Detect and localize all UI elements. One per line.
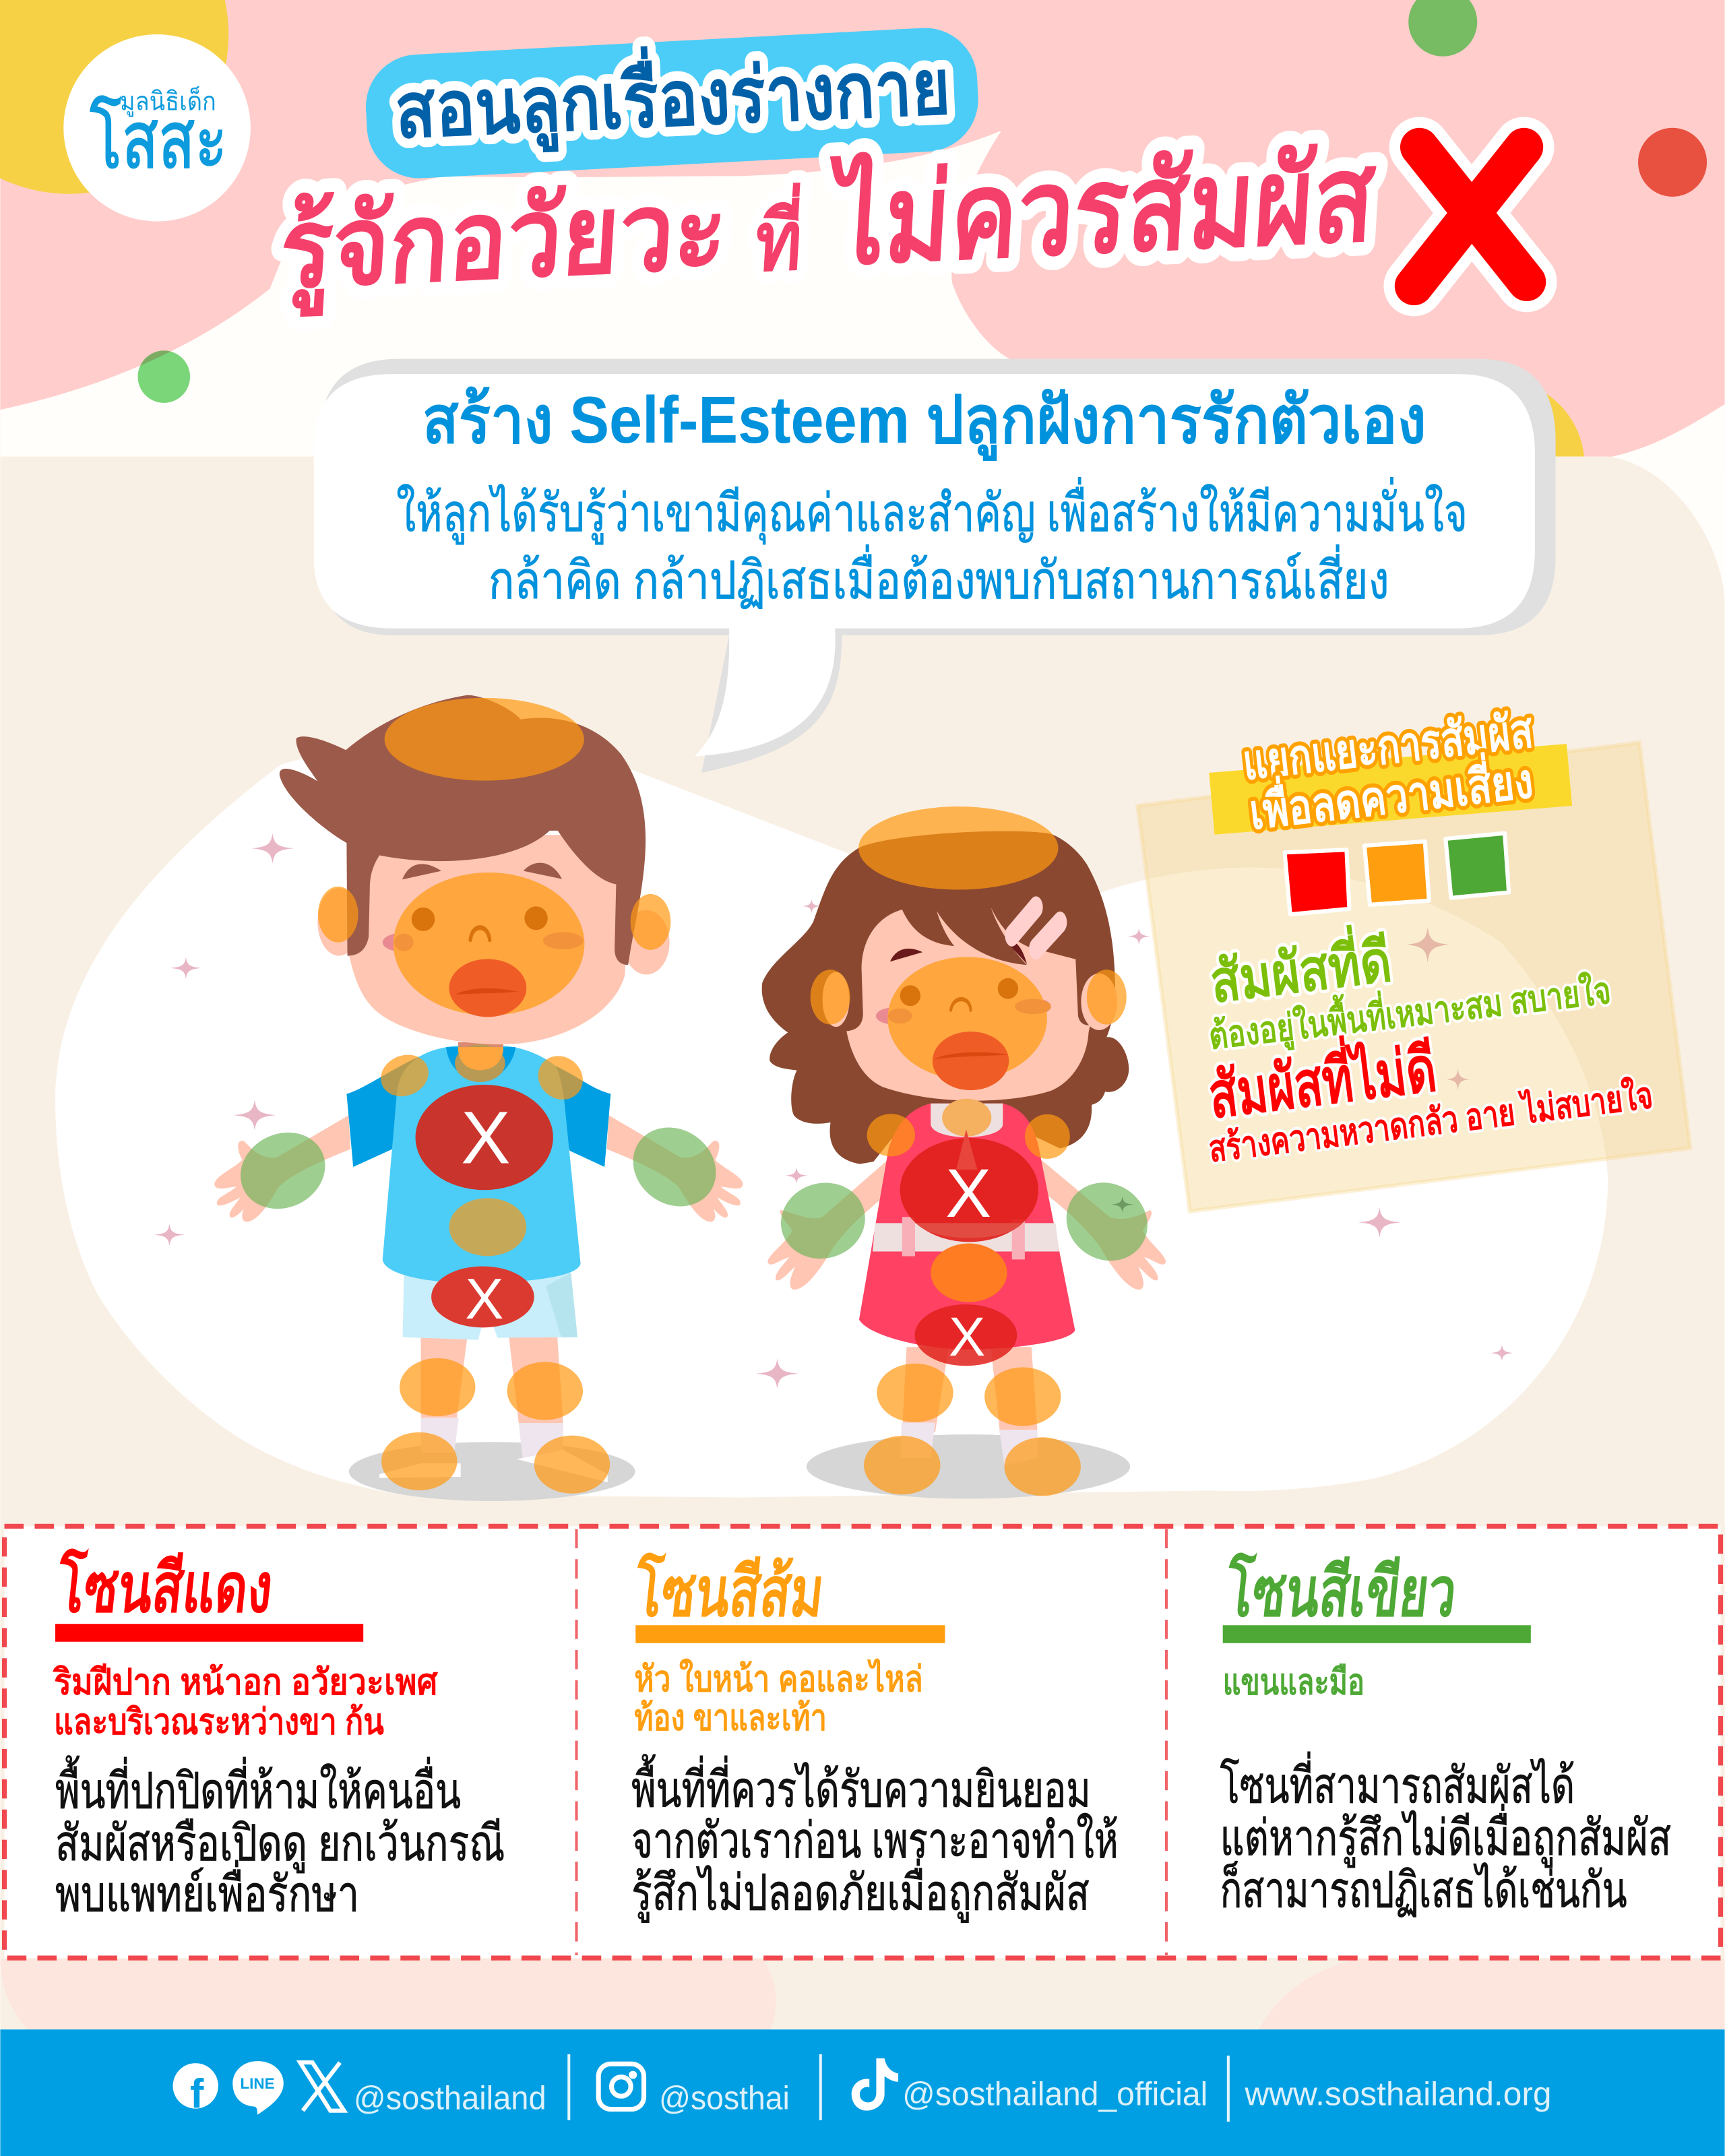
zone: orange: หัว ใบหน้า คอและไหล่ bbox=[634, 1658, 923, 1699]
zone: orange: พื้นที่ที่ควรได้รับความยินยอม bbox=[631, 1754, 1091, 1818]
orange zone: legs and feet bbox=[864, 1364, 1081, 1496]
ground shadow bbox=[807, 1434, 1130, 1499]
good touch text: สัมผัสที่ดี bbox=[1205, 920, 1395, 1015]
zone: orange: โซนสีส้ม bbox=[631, 1552, 828, 1630]
zone: green bbox=[1220, 1552, 1671, 1918]
colour swatches bbox=[1285, 833, 1509, 914]
orange zone: shoulders, neck, belly bbox=[379, 1044, 585, 1256]
orange zone: head and face bbox=[811, 806, 1127, 1080]
zone: red: ริมฝีปาก หน้าอก อวัยวะเพศ bbox=[53, 1662, 439, 1702]
red zone: lips bbox=[449, 959, 526, 1017]
green zone: arms bbox=[237, 1118, 720, 1216]
decorative dot: red bbox=[1638, 128, 1707, 197]
main title: ที่ bbox=[753, 183, 806, 289]
white X marks: X bbox=[461, 1097, 511, 1180]
logo: โสสะ bbox=[90, 96, 227, 185]
white X marks: X bbox=[949, 1306, 985, 1368]
divider lines bbox=[569, 2054, 1228, 2122]
icon: instagram bbox=[598, 2064, 644, 2110]
zone: red: และบริเวณระหว่างขา ก้น bbox=[54, 1702, 384, 1742]
good touch text bbox=[1205, 920, 1613, 1060]
icon: big red X bbox=[1414, 147, 1527, 286]
zone: red bbox=[53, 1548, 505, 1922]
website: www.sosthailand.org bbox=[1244, 2076, 1551, 2112]
orange zone: legs and feet bbox=[381, 1358, 610, 1494]
icon: line: LINE bbox=[240, 2075, 275, 2092]
girl figure bbox=[762, 806, 1166, 1499]
handle: @sosthailand bbox=[354, 2081, 546, 2117]
sparkle on legend bbox=[1406, 927, 1449, 963]
legend heading bbox=[1240, 704, 1536, 840]
zone: red: พื้นที่ปกปิดที่ห้ามให้คนอื่น bbox=[55, 1756, 461, 1819]
white X marks: X bbox=[465, 1267, 503, 1331]
boy legs and socks bbox=[379, 1337, 608, 1482]
orange zone: shoulders, neck, belly bbox=[867, 1099, 1070, 1302]
green zone: arms bbox=[780, 1178, 1150, 1266]
panel: zones bbox=[5, 1526, 1720, 1958]
speech bubble bbox=[314, 359, 1556, 773]
sparkle on legend small bbox=[1447, 1069, 1470, 1090]
icon: X bbox=[300, 2062, 344, 2111]
white X marks: X bbox=[945, 1155, 991, 1232]
logo: มูลนิธิเด็ก bbox=[120, 85, 216, 117]
zone: orange: ท้อง ขาและเท้า bbox=[634, 1698, 827, 1738]
red zone: chest bbox=[900, 1129, 1038, 1242]
decorative dot: green left bbox=[137, 350, 190, 403]
icon: facebook bbox=[173, 2063, 218, 2117]
icon: facebook: f bbox=[190, 2071, 204, 2117]
girl dress bbox=[859, 1104, 1075, 1350]
legend heading: แยกแยะการสัมผัส bbox=[1240, 704, 1536, 790]
boy shirt bbox=[346, 1042, 610, 1283]
zone: red: พบแพทย์เพื่อรักษา bbox=[55, 1860, 359, 1922]
red zone: groin bbox=[431, 1266, 534, 1327]
main title: ไม่ควรสัมผัส bbox=[822, 128, 1379, 290]
zone: green: แขนและมือ bbox=[1223, 1662, 1365, 1702]
icon: tiktok bbox=[852, 2058, 898, 2111]
zone: green: โซนที่สามารถสัมผัสได้ bbox=[1220, 1752, 1575, 1814]
title pill: สอนลูกเรื่องร่างกาย bbox=[393, 32, 952, 159]
main title: รู้จักอวัยวะ bbox=[276, 167, 730, 319]
bad touch text: สัมผัสที่ไม่ดี bbox=[1203, 1024, 1440, 1131]
zone: orange: รู้สึกไม่ปลอดภัยเมื่อถูกสัมผัส bbox=[631, 1859, 1090, 1923]
good touch text: ต้องอยู่ในพื้นที่เหมาะสม สบายใจ bbox=[1206, 963, 1613, 1060]
handle: @sosthai bbox=[659, 2081, 790, 2117]
speech bubble: สร้าง Self-Esteem ปลูกฝังการรักตัวเอง bbox=[422, 383, 1426, 462]
speech bubble: กล้าคิด กล้าปฏิเสธเมื่อต้องพบกับสถานการณ์เสี่ยง bbox=[489, 544, 1389, 610]
logo bbox=[63, 34, 251, 222]
small sparkle on girl arm bbox=[1111, 1197, 1134, 1213]
girl head bbox=[823, 908, 1117, 1101]
boy head bbox=[280, 695, 670, 1044]
white X marks bbox=[461, 1097, 991, 1368]
zone: orange: จากตัวเราก่อน เพราะอาจทำให้ bbox=[631, 1812, 1119, 1868]
girl legs and socks bbox=[901, 1347, 1038, 1465]
red zone: lips bbox=[933, 1032, 1009, 1090]
bad touch text bbox=[1203, 1024, 1655, 1170]
sparkles bbox=[154, 833, 1513, 1389]
girl arms bbox=[767, 1158, 1166, 1290]
zone: orange bbox=[631, 1552, 1119, 1923]
red zone: groin bbox=[915, 1304, 1017, 1366]
ground shadow bbox=[349, 1442, 635, 1501]
boy arms bbox=[214, 1115, 743, 1222]
red zone: chest bbox=[416, 1085, 553, 1190]
orange zone: head and face bbox=[318, 698, 670, 1015]
legend panel bbox=[1137, 704, 1691, 1211]
zone: red: โซนสีแดง bbox=[53, 1548, 276, 1626]
main title bbox=[276, 128, 1379, 319]
icon: line bbox=[232, 2061, 284, 2115]
title pill bbox=[363, 26, 981, 181]
boy figure bbox=[214, 695, 743, 1501]
handle: @sosthailand_official bbox=[902, 2076, 1208, 2112]
zone: red: สัมผัสหรือเปิดดู ยกเว้นกรณี bbox=[55, 1815, 505, 1873]
legend heading: เพื่อลดความเสี่ยง bbox=[1246, 747, 1536, 840]
decorative dot: green top bbox=[1408, 0, 1477, 57]
girl hair back bbox=[762, 831, 1129, 1164]
legend banner bbox=[1209, 744, 1572, 835]
footer bbox=[0, 2029, 1725, 2156]
boy shorts bbox=[403, 1273, 577, 1340]
zone: green: โซนสีเขียว bbox=[1222, 1552, 1460, 1630]
